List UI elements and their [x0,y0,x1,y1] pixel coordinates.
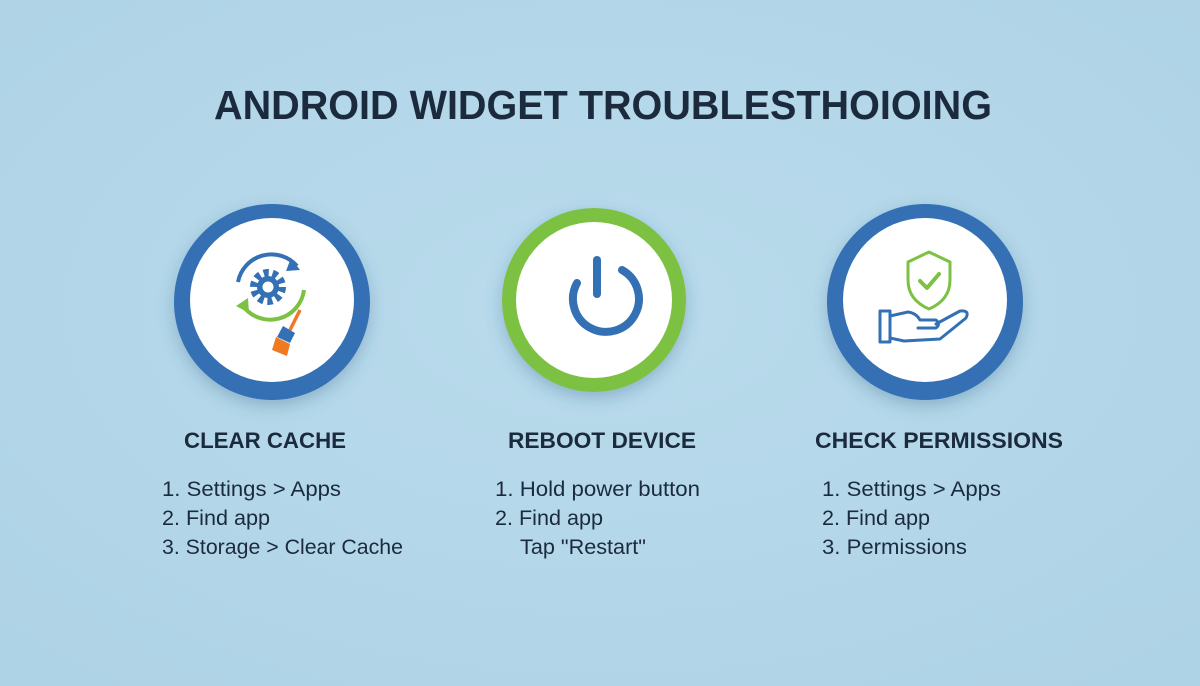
title: ANDROID WIDGET TROUBLESTHOIOING [214,82,992,128]
icon circle: permissions [827,204,1023,400]
heading: reboot device: REBOOT DEVICE [508,428,696,453]
icon: gear with arrows and broom [236,254,304,356]
steps: permissions [822,478,1001,559]
steps: clear cache: 2. Find app [162,507,270,530]
steps: clear cache: 1. Settings > Apps [162,478,341,501]
icon: power [573,260,639,332]
steps: clear cache: 3. Storage > Clear Cache [162,536,403,559]
icon: shield with hand [880,252,967,342]
steps: reboot: Tap "Restart" [520,536,646,559]
heading: check permissions: CHECK PERMISSIONS [815,428,1063,453]
steps: reboot: 2. Find app [495,507,603,530]
steps: permissions: 1. Settings > Apps [822,478,1001,501]
icon circle: reboot [502,208,686,392]
panel: check permissions [815,204,1063,559]
heading: clear cache: CLEAR CACHE [184,428,346,453]
steps: reboot: 1. Hold power button [495,478,700,501]
panel: clear cache [162,204,403,559]
steps: permissions: 3. Permissions [822,536,967,559]
steps: clear cache [162,478,403,559]
steps: permissions: 2. Find app [822,507,930,530]
panel: reboot device [495,208,700,559]
steps: reboot [495,478,700,559]
icon circle: clear cache [174,204,370,400]
